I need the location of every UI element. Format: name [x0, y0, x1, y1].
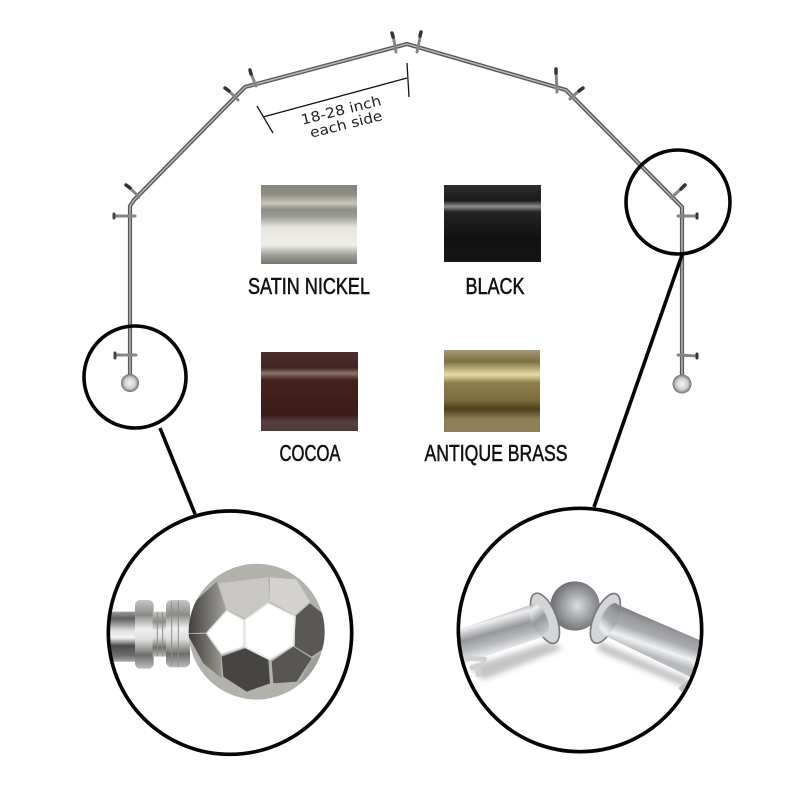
faceted ball	[187, 564, 327, 700]
label: antique brass: ANTIQUE BRASS	[424, 440, 568, 466]
dimension text line 2: each side	[308, 108, 384, 142]
detail: corner joint	[457, 508, 703, 752]
swatch: antique brass	[444, 350, 540, 432]
connector line: corner joint	[594, 255, 682, 507]
callout circle: finial on rod	[84, 326, 186, 428]
swatch: black	[444, 185, 541, 262]
callout circle: corner joint on rod	[626, 150, 730, 254]
swatch: satin nickel	[261, 185, 357, 264]
dimension text line 1: 18-28 inch	[300, 93, 383, 129]
rod segments	[130, 44, 682, 380]
label: cocoa: COCOA	[280, 440, 341, 466]
curtain rod	[114, 32, 697, 394]
finial rod and collars	[107, 600, 190, 669]
detail: faceted ball finial	[107, 511, 352, 754]
left rod ball	[121, 374, 139, 392]
dimension: 18-28 inch each side	[257, 63, 409, 142]
right tube	[599, 603, 700, 677]
joint ball	[550, 581, 600, 631]
left tube	[460, 604, 549, 664]
lower left bracket	[465, 658, 487, 677]
label: black: BLACK	[466, 273, 525, 299]
swatch: cocoa	[261, 352, 358, 431]
wall brackets	[114, 32, 697, 358]
connector line: finial	[160, 428, 195, 514]
left ring	[530, 592, 560, 644]
soft shadow	[470, 642, 690, 687]
lower right bracket	[680, 682, 690, 690]
right rod ball	[672, 374, 692, 394]
right ring	[590, 592, 622, 644]
magnified circle: finial	[108, 511, 352, 754]
label: satin nickel: SATIN NICKEL	[248, 273, 370, 299]
magnified circle: joint	[458, 508, 702, 752]
